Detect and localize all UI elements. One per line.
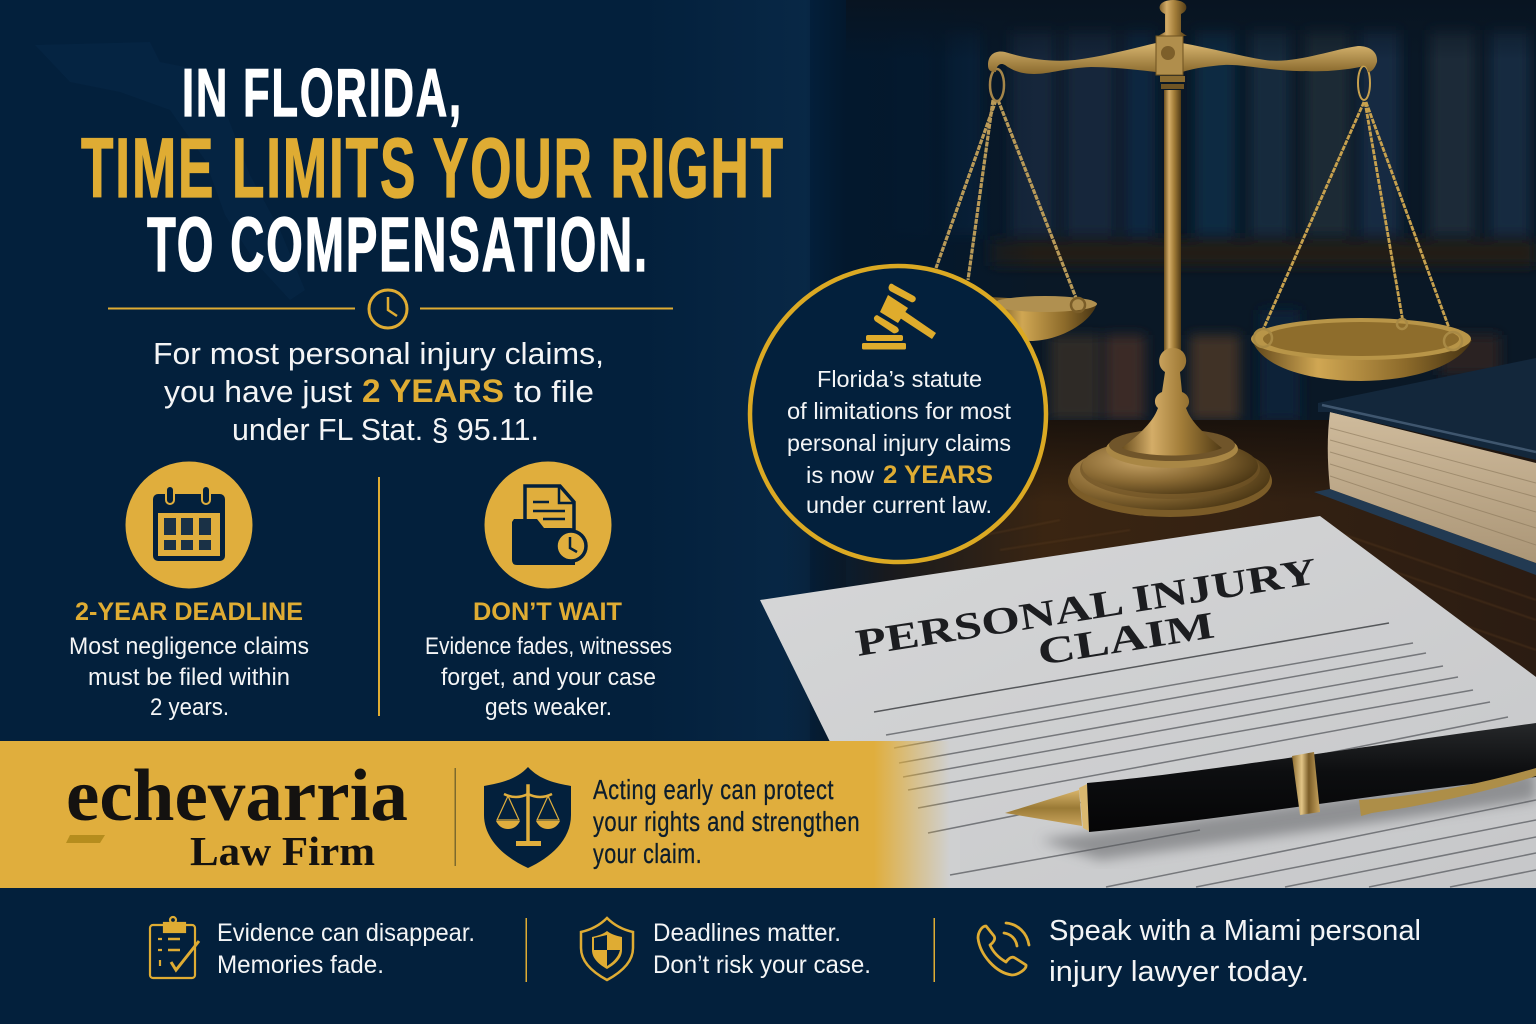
pen: [1005, 723, 1536, 860]
left scale pan: [990, 296, 1097, 341]
callout text: 2 YEARS: [883, 461, 993, 489]
footer call to action: [1049, 915, 1421, 988]
gold brand band: [0, 741, 950, 888]
footer call to action: injury lawyer today.: [1049, 956, 1309, 988]
law book: [1314, 358, 1536, 575]
callout text: Florida’s statute: [817, 366, 982, 392]
left chain link: [990, 69, 1004, 101]
title: [81, 55, 785, 288]
callout text: personal injury claims: [787, 430, 1011, 456]
icon: phone: [978, 923, 1029, 975]
icon: folder with clock: [484, 462, 612, 588]
intro paragraph: [153, 336, 604, 447]
intro paragraph: you have just: [164, 374, 352, 409]
brass scales of justice: [936, 0, 1472, 517]
lighter column left of photo: [640, 0, 810, 740]
footer item: evidence: Evidence can disappear.: [217, 919, 475, 947]
column: 2-year deadline: [69, 598, 309, 721]
finial: [1158, 0, 1187, 36]
intro paragraph: under FL Stat. § 95.11.: [232, 412, 539, 447]
beam left: [988, 43, 1156, 74]
band message: your rights and strengthen: [593, 806, 860, 837]
callout text: under current law.: [806, 492, 992, 518]
column: 2-year deadline: 2 years.: [150, 694, 229, 721]
band message: Acting early can protect: [593, 774, 834, 805]
column: don't wait: forget, and your case: [441, 664, 656, 691]
right scale pan: [1251, 318, 1472, 381]
column: don't wait: gets weaker.: [485, 694, 612, 721]
column: 2-year deadline: Most negligence claims: [69, 633, 309, 660]
footer item: evidence: Memories fade.: [217, 951, 384, 979]
footer item: deadlines: Don’t risk your case.: [653, 951, 871, 979]
intro paragraph: For most personal injury claims,: [153, 336, 604, 371]
post knob and flare: [1122, 348, 1222, 456]
personal injury claim document: [760, 516, 1536, 900]
column: don't wait: DON’T WAIT: [473, 598, 622, 626]
band message: your claim.: [593, 838, 702, 869]
left chains: [936, 100, 1078, 303]
right chains: [1262, 102, 1452, 336]
logo: echevarria law firm: Law Firm: [190, 828, 375, 874]
footer item: evidence: [217, 919, 475, 979]
intro paragraph: to file: [514, 374, 594, 409]
photo background: bookshelf: [846, 0, 1536, 430]
post: [1164, 90, 1181, 360]
beam centre block: [1156, 36, 1185, 89]
icon: calendar: [126, 462, 252, 588]
icon: shield with scales: [484, 767, 571, 868]
column: 2-year deadline: 2-YEAR DEADLINE: [75, 598, 303, 626]
document title: PERSONAL INJURY: [853, 551, 1320, 665]
soft seam between column and photo: [806, 0, 846, 740]
divider with clock icon: [108, 290, 673, 328]
title: TIME LIMITS YOUR RIGHT: [81, 121, 785, 215]
footer item: deadlines: [653, 919, 871, 979]
logo: echevarria law firm: [66, 755, 408, 874]
footer item: deadlines: Deadlines matter.: [653, 919, 841, 947]
document title second line: CLAIM: [1035, 605, 1217, 674]
scale base: [1068, 429, 1272, 517]
callout text: is now: [806, 462, 874, 488]
callout text: [787, 366, 1012, 518]
column: don't wait: Evidence fades, witnesses: [425, 633, 672, 660]
intro paragraph: 2 YEARS: [362, 373, 504, 409]
icon: gavel: [862, 284, 936, 350]
column: 2-year deadline: must be filed within: [88, 664, 290, 691]
beam right: [1182, 43, 1377, 72]
band message: [593, 774, 860, 869]
faint Florida map silhouette: [35, 42, 305, 300]
title: IN FLORIDA,: [182, 55, 463, 131]
icon: clipboard checklist: [150, 917, 199, 978]
right chain link: [1358, 66, 1370, 100]
wooden table: [780, 420, 1536, 750]
callout text: of limitations for most: [787, 398, 1012, 424]
callout circle: statute of limitations: [750, 266, 1046, 562]
column: don't wait: [425, 598, 672, 721]
logo: echevarria law firm: echevarria: [66, 755, 408, 837]
footer call to action: Speak with a Miami personal: [1049, 915, 1421, 947]
icon: shield with clock: [581, 918, 633, 980]
title: TO COMPENSATION.: [147, 202, 649, 288]
